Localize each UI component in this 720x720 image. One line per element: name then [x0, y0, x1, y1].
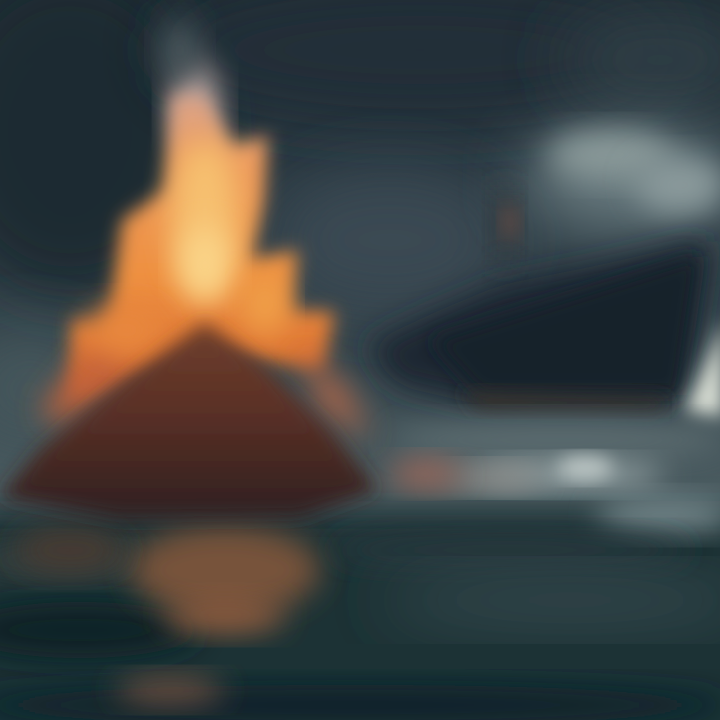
bright glow beyond ship bow [684, 318, 720, 418]
storm clouds at upper right [520, 131, 720, 228]
smoke column above the flames [160, 20, 219, 160]
sea and waves [0, 420, 720, 720]
fire reflection on water [15, 525, 320, 704]
burning volcanic peak [0, 322, 378, 520]
ship silhouette [365, 190, 708, 412]
flames [40, 95, 372, 440]
glowing shoreline spray [389, 459, 461, 489]
